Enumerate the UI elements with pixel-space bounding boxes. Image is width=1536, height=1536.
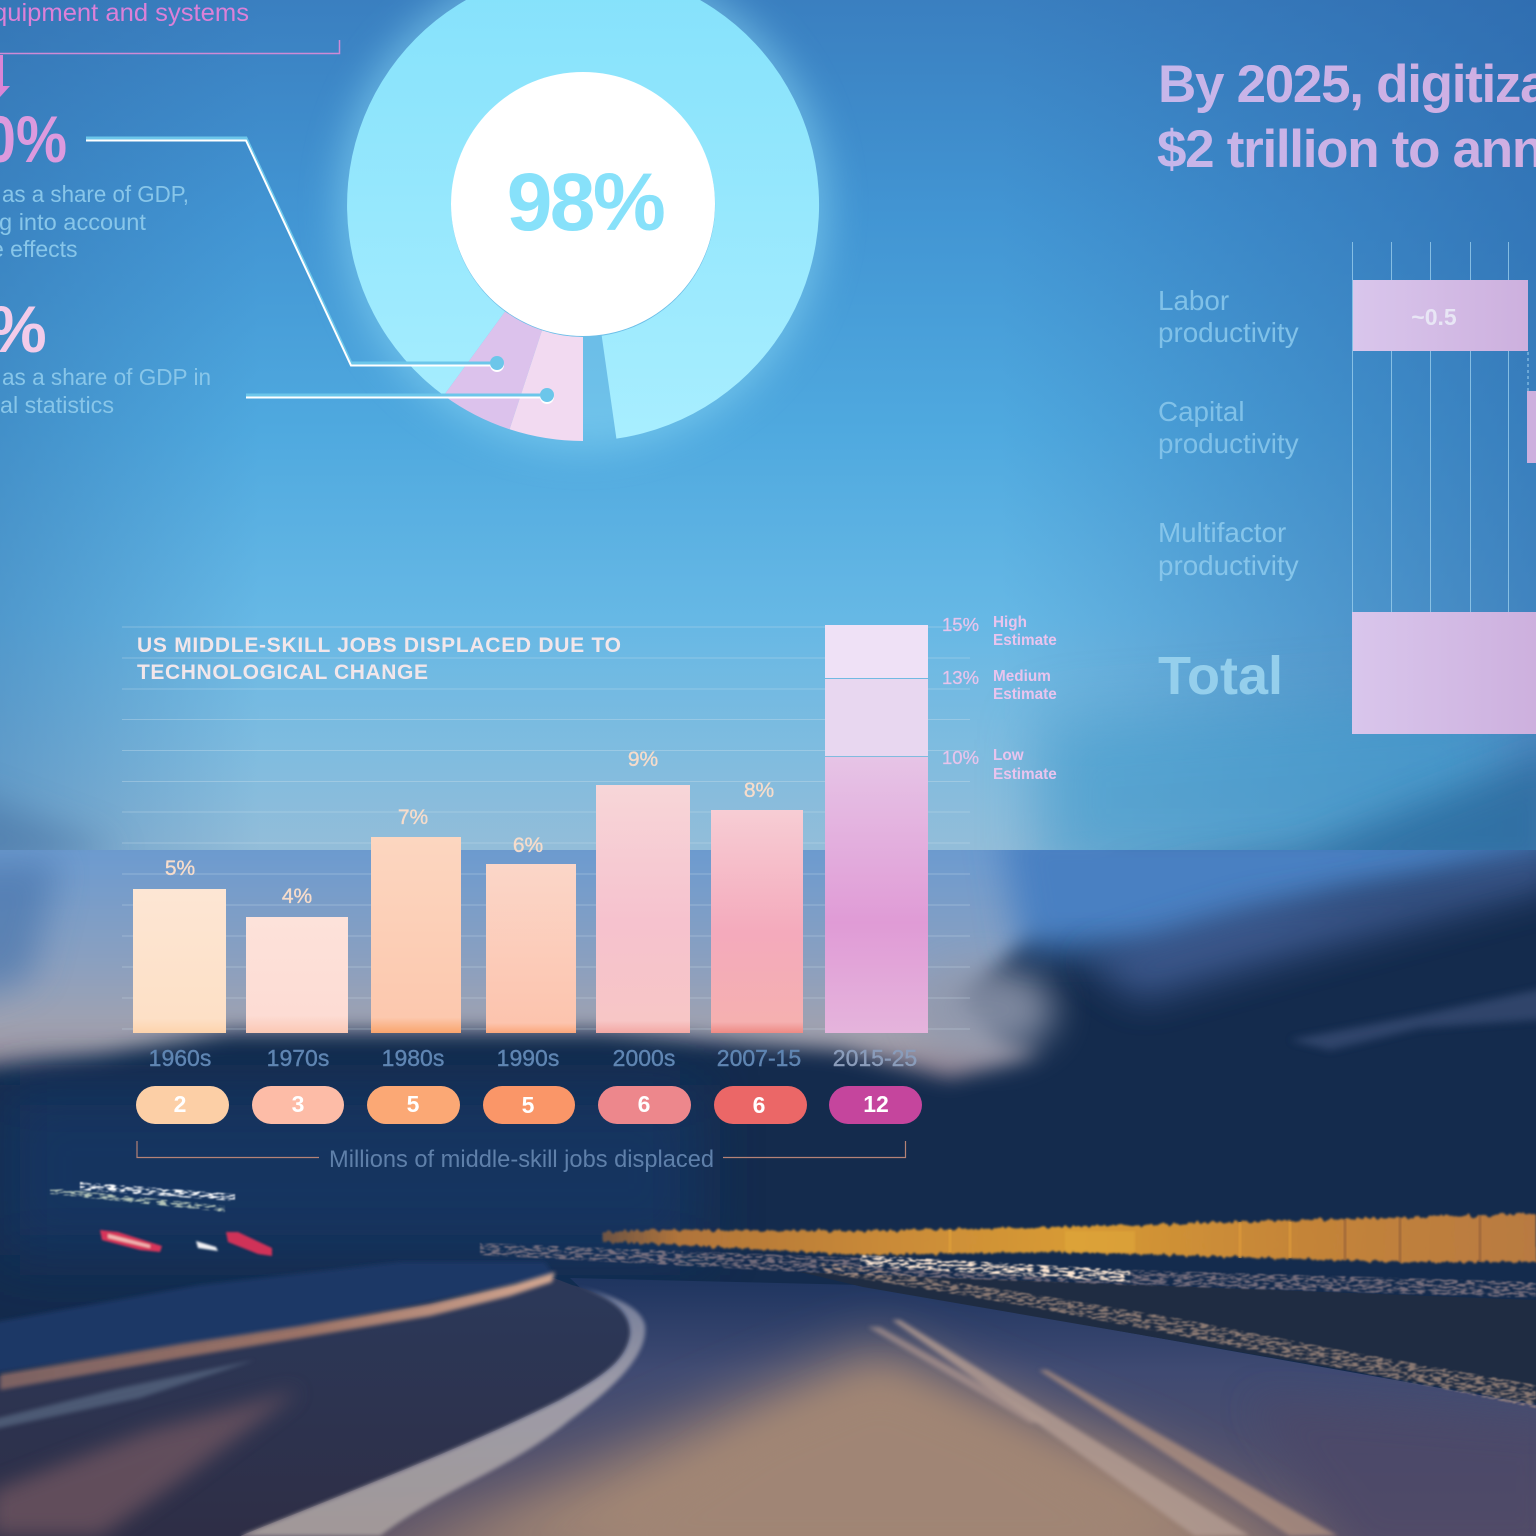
row label: capital productivity: productivity xyxy=(1158,428,1299,459)
pills: jobs displaced in millions xyxy=(136,1086,922,1124)
estimate labels: High xyxy=(993,614,1027,631)
estimate percentages: 15% xyxy=(942,614,979,635)
estimate percentages: 10% xyxy=(942,747,979,768)
estimate labels: Medium xyxy=(993,668,1051,685)
estimate labels: Estimate xyxy=(993,686,1057,703)
donut lilac slice xyxy=(444,312,542,429)
callout lines xyxy=(86,138,547,398)
bar 1990s xyxy=(486,864,576,1033)
bar value labels: 8% xyxy=(744,779,774,802)
estimate labels xyxy=(993,614,1057,783)
bar 2015-25 low estimate xyxy=(825,757,928,1033)
bar chart: middle-skill jobs displaced xyxy=(122,614,1057,1173)
bar 1960s xyxy=(133,889,226,1033)
productivity chart xyxy=(1158,242,1536,734)
guard rail light xyxy=(0,1272,555,1390)
road right shoulder xyxy=(800,1272,1536,1403)
chart title: US MIDDLE-SKILL JOBS DISPLACED DUE TO xyxy=(137,634,621,657)
year labels: 1960s xyxy=(149,1045,211,1071)
bar 2015-25 high estimate xyxy=(825,625,928,678)
bar value: ~0.5 xyxy=(1411,304,1457,330)
highway lights: orange streak xyxy=(604,1214,1536,1262)
row label: labor productivity: Labor xyxy=(1158,285,1229,316)
year labels xyxy=(149,1045,917,1071)
bar 2000s xyxy=(596,785,690,1033)
grid lines xyxy=(122,627,970,1029)
estimate percentages: 13% xyxy=(942,667,979,688)
pills: jobs displaced in millions: 5 xyxy=(407,1091,420,1117)
donut pink slice xyxy=(510,330,583,441)
year labels: 1990s xyxy=(497,1045,559,1071)
bar 1980s xyxy=(371,837,461,1033)
year labels: 1980s xyxy=(382,1045,444,1071)
lane lines xyxy=(868,1320,1338,1536)
bar 2015-25 medium estimate xyxy=(825,679,928,756)
row label: multifactor productivity: Multifactor xyxy=(1158,517,1286,548)
bar: labor xyxy=(1353,280,1528,351)
pills: jobs displaced in millions: 6 xyxy=(638,1091,650,1117)
bracket caption: Millions of middle-skill jobs displaced xyxy=(329,1146,714,1173)
bar 1970s xyxy=(246,917,348,1033)
row label: labor productivity: productivity xyxy=(1158,317,1299,348)
background: night road photograph xyxy=(0,820,1536,1536)
year labels: 2015-25 xyxy=(833,1045,917,1071)
estimate labels: Estimate xyxy=(993,632,1057,649)
background: blue sky xyxy=(0,0,1536,880)
estimate labels: Low xyxy=(993,747,1024,764)
bar value labels: 4% xyxy=(282,885,312,908)
callout dots xyxy=(490,356,554,404)
stat two description line 1: as a share of GDP in xyxy=(2,364,211,390)
year labels: 1970s xyxy=(267,1045,329,1071)
bar value labels: 6% xyxy=(513,834,543,857)
pills: jobs displaced in millions: 3 xyxy=(292,1091,304,1117)
pills: jobs displaced in millions: 2 xyxy=(174,1091,186,1117)
right heading: $2 trillion to ann xyxy=(1157,120,1536,179)
stat one description line 1: as a share of GDP, xyxy=(2,181,189,207)
road surface xyxy=(240,1278,1536,1536)
year labels: 2007-15 xyxy=(717,1045,801,1071)
estimate labels: Estimate xyxy=(993,766,1057,783)
bracket with arrow xyxy=(0,40,340,97)
bar value labels: 9% xyxy=(628,748,658,771)
white edge line xyxy=(240,1285,645,1536)
pills: jobs displaced in millions: 6 xyxy=(753,1092,765,1118)
connector xyxy=(1527,352,1529,391)
chart title second line: TECHNOLOGICAL CHANGE xyxy=(137,661,428,684)
year labels: 2000s xyxy=(613,1045,675,1071)
row label: capital productivity: Capital xyxy=(1158,396,1245,427)
bar: total xyxy=(1352,612,1536,734)
left embankment xyxy=(0,1278,630,1536)
donut chart: 98 percent xyxy=(337,0,829,451)
pills: jobs displaced in millions: 12 xyxy=(863,1091,889,1117)
stat two description line 2: al statistics xyxy=(0,392,114,418)
estimate percentages xyxy=(942,614,979,768)
row label: total: Total xyxy=(1158,646,1283,706)
highway lights: white specks and shoulder xyxy=(50,1182,1536,1408)
bar value labels: 5% xyxy=(165,857,195,880)
pills: jobs displaced in millions: 5 xyxy=(522,1092,535,1118)
top left text block: share of GDP xyxy=(0,0,340,418)
row label: multifactor productivity: productivity xyxy=(1158,550,1299,581)
centre circle xyxy=(451,72,715,336)
donut main slice xyxy=(347,0,819,439)
bar value labels: 7% xyxy=(398,806,428,829)
stat one description line 2: g into account xyxy=(0,209,147,235)
car tail lights xyxy=(100,1230,272,1256)
bar: capital xyxy=(1527,391,1536,463)
millions bracket xyxy=(137,1141,906,1158)
axis lines xyxy=(1352,242,1508,612)
bar 2007-15 xyxy=(711,810,803,1033)
bar value labels xyxy=(165,748,774,908)
centre value: 98% xyxy=(507,157,664,248)
